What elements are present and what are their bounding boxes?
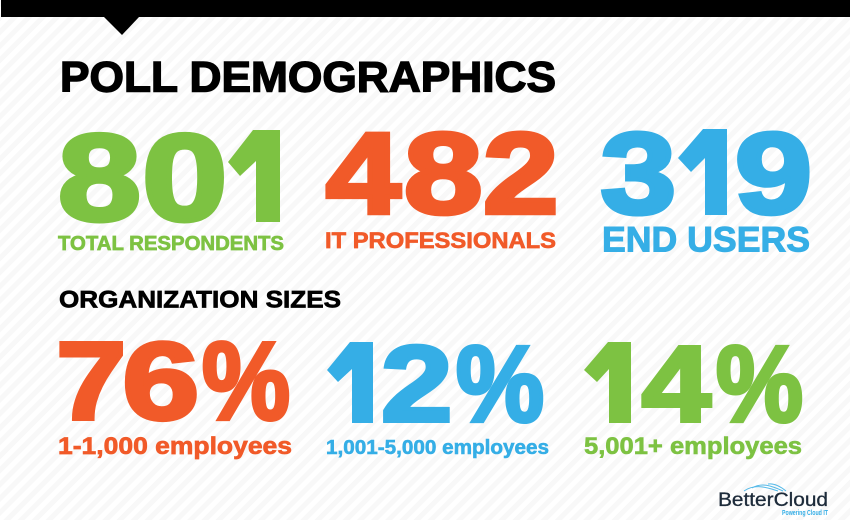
stat: 12%: 1,001-5,000 employees [326,437,549,459]
stat: 12% [327,342,548,458]
stat: 319 end users: 3 [601,110,676,238]
logo: BetterCloud: BetterCloud [718,490,828,511]
stat: 12%: 2 [381,323,452,444]
stat: 801 total respondents: 0 [142,110,228,247]
stat: 76%: % [202,320,290,443]
logo: BetterCloud: Powering Cloud IT [782,510,829,517]
stat: 76%: 6 [122,320,199,443]
stat: 14%: 5,001+ employees [584,433,802,460]
stat: 14%: % [716,323,803,444]
stat: 482 IT professionals: 8 [404,110,482,238]
top banner with pointer [1,0,850,35]
stat: 319 end users: 9 [735,110,812,238]
stat: 801 total respondents: 1 [232,110,302,246]
stat: 319 end users [600,129,810,252]
stat: 76%: 1-1,000 employees [58,433,292,460]
stat: 801 total respondents: 8 [58,110,141,247]
logo: BetterCloud [718,484,829,517]
stat: 482 IT professionals: 4 [326,110,401,238]
stat: 12%: % [456,323,544,444]
stat: 14%: 1 [587,323,651,444]
stat: 76% [56,320,292,460]
stat: 801 total respondents [58,130,284,250]
stat: 482 IT professionals: 2 [483,110,558,238]
stat: 482 IT professionals: IT PROFESSIONALS [325,228,556,253]
stat: 14% [584,342,802,460]
stat: 801 total respondents: TOTAL RESPONDENTS [58,233,284,255]
title: POLL DEMOGRAPHICS [60,54,556,102]
stat: 319 end users: END USERS [602,220,810,260]
stat: 12%: 1 [329,323,393,444]
stat: 76%: 7 [56,320,126,443]
section heading: organization sizes: ORGANIZATION SIZES [59,286,341,314]
stat: 482 IT professionals [325,110,558,253]
stat: 14%: 4 [642,323,711,444]
stat: 319 end users: 1 [682,110,748,238]
